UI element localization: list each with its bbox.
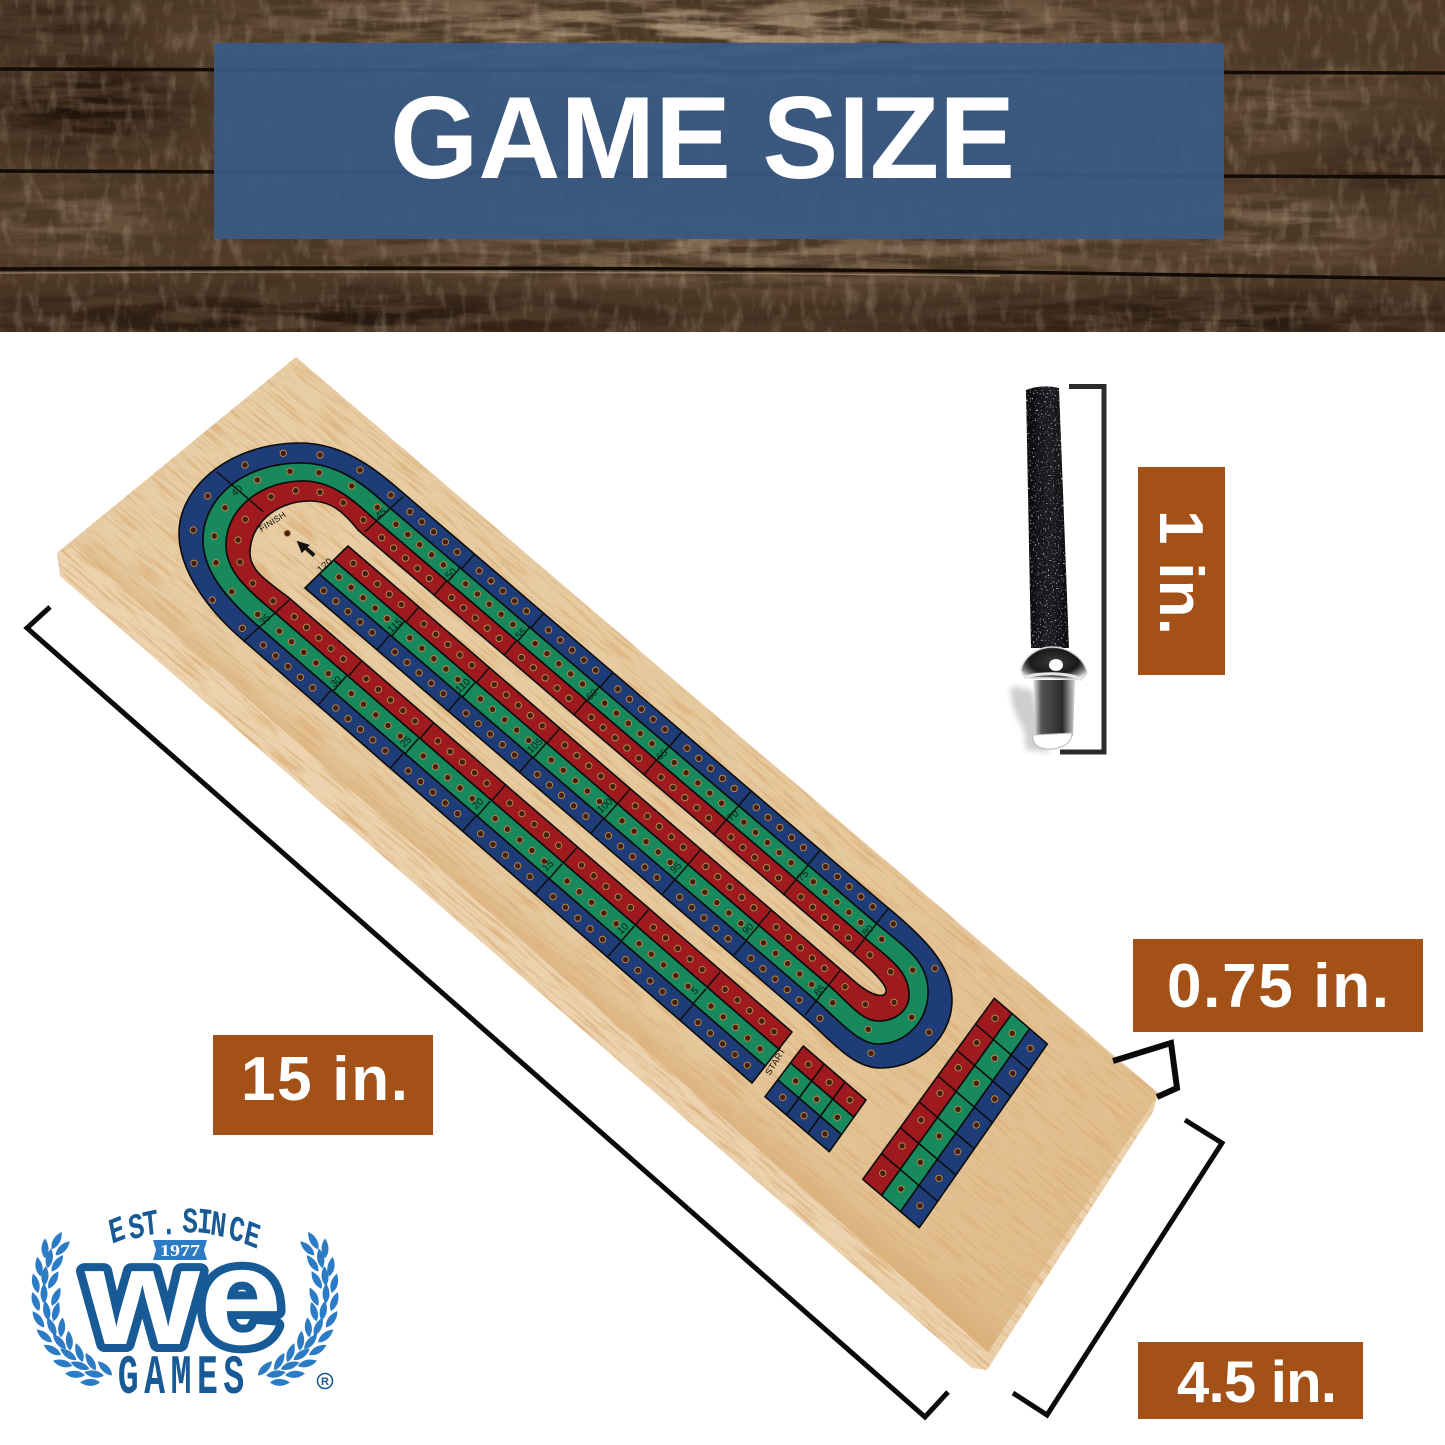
board top face (57, 357, 1158, 1352)
track numbers: 75 (796, 868, 811, 884)
track numbers: 85 (813, 983, 828, 999)
track numbers: 20 (471, 796, 486, 812)
peg shadow (1011, 686, 1050, 752)
start block (765, 1046, 866, 1152)
label: 4.5 in. (1138, 1342, 1363, 1419)
track numbers: 35 (258, 612, 273, 628)
label: 1 in.: 1 in. (1146, 510, 1215, 635)
label: 1 in. (1138, 467, 1225, 675)
label: 4.5 in.: 4.5 in. (1177, 1350, 1337, 1415)
label: 15 in. (213, 1035, 433, 1135)
peg holes (193, 453, 1030, 1206)
track numbers: 25 (399, 734, 414, 750)
track numbers: 105 (525, 736, 546, 756)
track numbers: 50 (444, 566, 459, 582)
peg track: red band (226, 481, 909, 1049)
logo arc text: EST. SINCE (106, 1203, 263, 1260)
bracket: board thickness (1113, 1043, 1177, 1097)
track numbers: 70 (726, 808, 741, 824)
logo ribbon (153, 1240, 207, 1260)
track numbers: 40 (230, 483, 245, 499)
game score block (863, 998, 1047, 1228)
track numbers: 10 (616, 921, 631, 937)
label: 15 in.: 15 in. (241, 1045, 408, 1114)
track numbers: 90 (741, 921, 756, 937)
bracket: board length (27, 607, 948, 1417)
logo: WE Games (29, 1203, 341, 1410)
logo laurel right (255, 1230, 341, 1386)
label: 0.75 in.: 0.75 in. (1167, 952, 1389, 1021)
track numbers: 115 (386, 616, 405, 636)
peg highlights (1049, 659, 1063, 671)
peg track: blue band (179, 443, 952, 1083)
track numbers: 15 (541, 858, 556, 874)
peg ball (1021, 647, 1087, 680)
logo mark: we (84, 1220, 282, 1374)
track numbers: 120 (315, 556, 336, 576)
track numbers (230, 483, 876, 999)
header: wood plank banner (0, 0, 1445, 366)
track numbers: 110 (454, 676, 473, 696)
track numbers: 60 (585, 687, 600, 703)
label: 0.75 in. (1133, 939, 1423, 1032)
track numbers: 5 (690, 985, 701, 997)
wood grain (58, 357, 1158, 1370)
track numbers: 65 (655, 747, 670, 763)
peg photo (1011, 386, 1087, 752)
track numbers: 95 (669, 860, 684, 876)
peg neck (1033, 680, 1075, 736)
logo laurel left (29, 1230, 115, 1386)
peg collar ring (1024, 674, 1082, 680)
logo registered mark: R (321, 1376, 329, 1388)
logo wordmark: GAMES (118, 1346, 250, 1410)
track numbers: 55 (514, 626, 529, 642)
cribbage board (57, 357, 1158, 1370)
logo registered mark (318, 1374, 332, 1388)
bracket: board width (1013, 1120, 1222, 1415)
track numbers: 45 (374, 506, 389, 522)
track numbers: 30 (329, 674, 344, 690)
start label: START (763, 1046, 788, 1077)
title: GAME SIZE (390, 72, 1015, 203)
title panel: blue banner (214, 43, 1224, 239)
board body and bevel (57, 357, 1158, 1370)
finish label: FINISH (257, 509, 288, 534)
track dividers (217, 472, 888, 1065)
lower edge tone (70, 555, 1000, 1365)
icon: finish arrow (297, 541, 316, 557)
track numbers: 100 (595, 796, 616, 816)
logo year: 1977 (160, 1241, 201, 1260)
track numbers: 80 (861, 923, 876, 939)
bracket: peg height (1060, 386, 1104, 752)
peg track: green band (203, 463, 928, 1066)
peg shaft (1026, 386, 1069, 648)
